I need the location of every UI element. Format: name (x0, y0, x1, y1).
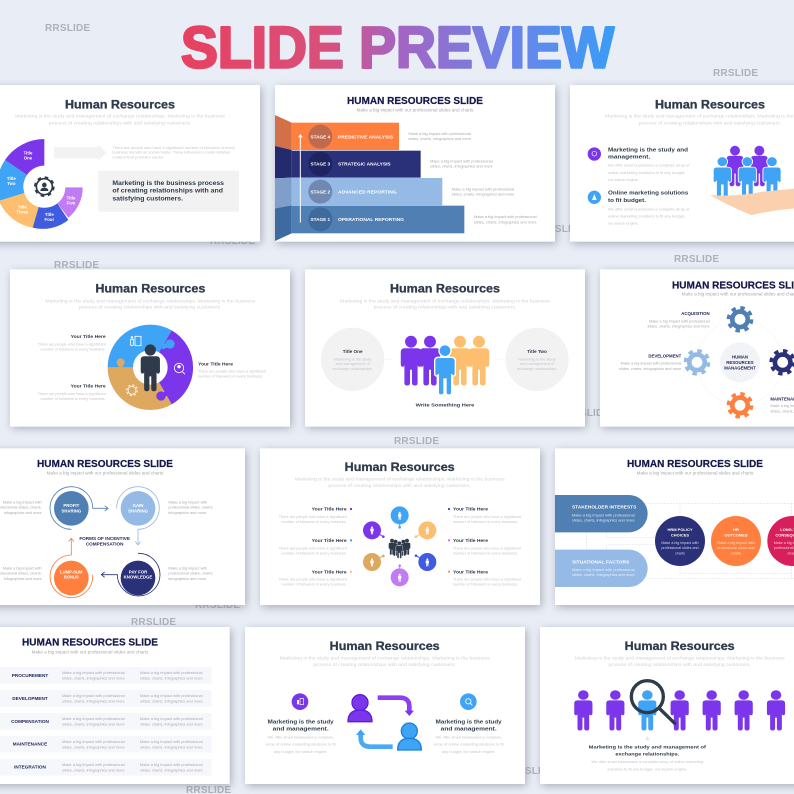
text block (589, 745, 706, 771)
heading: Human Resources (625, 639, 735, 653)
subtitle (605, 114, 794, 126)
circle: title one: Marketing is the study (334, 357, 371, 361)
text block: content that provides useful (112, 156, 163, 160)
panel: slide 3 people on hand (570, 85, 794, 244)
text: top left: infographics and more (4, 511, 42, 515)
list: right: number of followers in every business. (453, 583, 518, 587)
heading: Human Resources (655, 97, 765, 111)
bubble cluster (363, 506, 436, 586)
callout: Marketing is the business process (112, 180, 224, 187)
icon: group (389, 539, 410, 558)
circle: title one: Title One (343, 349, 363, 354)
circle: title two: and management of (520, 362, 555, 366)
panel: slide 11 exchange (245, 627, 527, 786)
row: development: slides, charts, infographics and more (140, 699, 203, 703)
text: bottom right: infographics and more (168, 577, 206, 581)
people row (574, 690, 785, 730)
center label: COMPENSATION (86, 542, 124, 547)
circle: hr outcomes: charts (731, 551, 741, 555)
panel: slide 8 hub bubbles (260, 448, 542, 607)
row: maintenance: MAINTENANCE (13, 742, 47, 747)
row: integration: Make a big impact with professional (140, 763, 203, 767)
circle: long-term consequences (767, 516, 794, 566)
row: procurement: slides, charts, infographics and more (62, 676, 125, 680)
text block: exchange relationships. (615, 751, 680, 757)
stage descriptions: slides, charts, infographics and more (474, 220, 537, 224)
circle: title two (505, 328, 569, 391)
row: maintenance: slides, charts, infographics and more (62, 745, 125, 749)
circle: title one (321, 328, 384, 391)
text block: budget: Online marketing solutions (608, 191, 688, 197)
subtitle: process of creating relationships with and satisfying customers. (313, 662, 456, 668)
row: maintenance (0, 736, 212, 753)
donut chart: Two (7, 181, 16, 186)
callout: satisfying customers. (112, 195, 183, 202)
pointer (645, 736, 649, 740)
subtitle: Marketing is the study and management of exchange relationships. Marketing is the business (280, 656, 490, 662)
label: development (619, 353, 682, 371)
heading: Human Resources (330, 639, 440, 653)
circle: title one: exchange relationships. (333, 367, 373, 371)
row: development: DEVELOPMENT (12, 696, 48, 701)
text block: right: and management. (441, 727, 497, 733)
heading: HUMAN RESOURCES SLIDE (627, 459, 764, 470)
callout: of creating relationships with and (112, 188, 223, 195)
icon: person badge (588, 191, 601, 204)
heading: Human Resources (95, 282, 206, 296)
node: profit sharing: SHARING (61, 508, 82, 513)
list: right: number of followers in every business. (453, 520, 518, 524)
circle: hrm policy choices: charts (675, 551, 685, 555)
text block: left: array of online marketing solutions to fit (266, 743, 337, 747)
heading: HUMAN RESOURCES SLIDE (37, 459, 174, 470)
center label: FORMS OF INCENTIVE (79, 536, 130, 541)
text: bottom right: Make a big impact with (168, 567, 207, 571)
circle: title two: exchange relationships. (517, 367, 557, 371)
circle: hr outcomes: OUTCOMES (724, 532, 748, 537)
text: bottom left: Make a big impact with (3, 567, 42, 571)
icon: phone (131, 336, 141, 346)
circle: hrm policy choices (655, 516, 705, 566)
watermarks: RRSLIDE (713, 68, 758, 79)
node: lump sum bonus: LUMP-SUM (60, 569, 83, 574)
watermarks: RRSLIDE (131, 617, 176, 628)
node: gain sharing: GAIN (133, 503, 143, 508)
panel: slide 6 gears (600, 269, 794, 428)
text block: right (434, 719, 505, 754)
subtitle: process of creating relationships with and satisfying customers. (328, 483, 471, 489)
panel: slide 2 stages (275, 85, 557, 244)
list: right: Your Title Here (453, 507, 488, 513)
text: right: Your Title Here (198, 361, 233, 367)
text: bottom left: infographics and more (4, 577, 42, 581)
text block: budget (608, 191, 690, 226)
row: integration: Make a big impact with professional (62, 763, 125, 767)
list: left: Your Title Here (312, 538, 347, 544)
list: right: There are people who have a significant (453, 578, 522, 582)
heading: HUMAN RESOURCES SLIDE (347, 96, 484, 107)
row: maintenance: Make a big impact with professional (62, 740, 125, 744)
donut chart: Title (45, 212, 54, 217)
text: top right (168, 501, 213, 515)
text block: study: online marketing solutions to fit any budget, (608, 171, 685, 175)
stair chart (275, 115, 464, 241)
row: development (0, 690, 212, 707)
list: right: There are people who have a significant (453, 515, 522, 519)
label: development: slides, charts, infographics and more (619, 367, 681, 371)
list: left: There are people who have a significant (279, 515, 348, 519)
row: compensation: COMPENSATION (11, 719, 49, 724)
node: gain sharing (117, 487, 159, 545)
illustration: team (401, 336, 489, 395)
arrow: blue (356, 729, 393, 747)
list: right: There are people who have a significant (453, 546, 522, 550)
node: lump sum bonus (50, 538, 93, 598)
text: top left (38, 334, 107, 351)
subtitle: Marketing is the study and management of exchange relationships. Marketing is the business (15, 114, 226, 120)
text: top left: Your Title Here (71, 334, 106, 340)
box: stakeholder interests: Make a big impact with professional (572, 513, 635, 517)
box: situational factors: slides, charts, infographics and more (572, 573, 635, 577)
text block: budget: We offer small businesses a complete array of (608, 207, 690, 211)
subtitle: Marketing is the study and management of exchange relationships. Marketing is the business (45, 298, 256, 304)
text: bottom right (168, 567, 213, 581)
row: development: Make a big impact with professional (140, 694, 203, 698)
list: left: There are people who have a significant (279, 546, 348, 550)
donut chart: Three (16, 209, 29, 214)
row: maintenance: Make a big impact with professional (140, 740, 203, 744)
list: right (448, 507, 522, 587)
panel: slide 5 team (305, 269, 587, 428)
title: SLIDE PREVIEW (181, 16, 614, 80)
label: maintenance (770, 396, 794, 413)
subtitle: Marketing is the study and management of exchange relationships. Marketing is the business (340, 298, 551, 304)
box: stakeholder interests: slides, charts, infographics and more (572, 518, 635, 522)
box: situational factors: Make a big impact with professional (572, 568, 635, 572)
gear: development (685, 351, 709, 374)
subtitle: Marketing is the study and management of exchange relationships. Marketing is the business (295, 477, 505, 483)
panel: slide 9 flow (555, 448, 794, 607)
subtitle: Make a big impact with our professional slides and charts (357, 107, 473, 112)
subtitle: Marketing is the study and management of exchange relationships. Marketing is the business (575, 656, 785, 662)
row: compensation: Make a big impact with professional (62, 717, 125, 721)
gear: maintenance (728, 394, 752, 417)
row: procurement: PROCUREMENT (12, 673, 48, 678)
watermarks: RRSLIDE (510, 766, 555, 777)
watermarks: RRSLIDE (195, 600, 240, 611)
row: procurement: Make a big impact with professional (62, 671, 125, 675)
text: top left: number of followers in every business. (41, 347, 106, 351)
stage descriptions: slides, charts, infographics and more (408, 137, 471, 141)
callout (98, 171, 239, 212)
icon: gear (127, 385, 137, 396)
node: pay for knowledge: PAY FOR (129, 569, 148, 574)
text block: left: Marketing is the study (268, 719, 335, 725)
stage descriptions: Make a big impact with professional (474, 215, 537, 219)
subtitle: process of creating relationships with and satisfying customers. (374, 305, 516, 311)
row: development: slides, charts, infographics and more (62, 699, 125, 703)
watermarks: RRSLIDE (565, 408, 610, 419)
subtitle: Make a big impact with our professional slides and charts (682, 292, 794, 297)
heading: Human Resources (345, 460, 455, 474)
text block: Marketing is the study and management of (589, 745, 706, 751)
text block: study: management. (608, 155, 651, 161)
arrow (54, 145, 107, 161)
heading: HUMAN RESOURCES SLIDE (22, 638, 159, 649)
panel: slide 1 pie process (0, 85, 262, 244)
node: profit sharing: PROFIT (63, 503, 80, 508)
icon: purple badge (292, 693, 308, 710)
subtitle (15, 114, 226, 126)
text: right (198, 361, 267, 379)
stage descriptions: slides, charts, infographics and more (430, 165, 493, 169)
text block: left: and management. (273, 727, 329, 733)
subtitle (295, 477, 505, 489)
center hub: HUMAN (732, 354, 748, 359)
text: top left: There are people who have a significant (38, 342, 107, 346)
text: bottom left (0, 567, 42, 581)
panel: slide 4 puzzle circle (10, 269, 292, 428)
list: right: number of followers in every business. (453, 551, 518, 555)
text: top left (0, 501, 42, 515)
donut chart: Title (18, 204, 27, 209)
donut chart (0, 139, 83, 229)
node: lump sum bonus: BONUS (64, 575, 79, 580)
list: right: Your Title Here (453, 538, 488, 544)
donut chart: One (24, 155, 33, 160)
node: pay for knowledge: KNOWLEDGE (124, 575, 152, 580)
donut chart: Title (24, 150, 33, 155)
text: bottom left: number of followers in every business. (41, 397, 106, 401)
watermarks: RRSLIDE (45, 23, 90, 34)
list: left: number of followers in every business. (282, 583, 347, 587)
circle: title two: Marketing is the study (518, 357, 556, 361)
text block: study: Marketing is the study and (608, 147, 689, 153)
text: top right: Make a big impact with (168, 501, 207, 505)
box: stakeholder interests (555, 495, 648, 532)
subtitle: process of creating relationships with and satisfying customers. (639, 120, 781, 126)
row: procurement: Make a big impact with professional (140, 671, 203, 675)
icon: magnifier (631, 681, 675, 723)
text: top right: professional slides, charts, (168, 506, 213, 510)
label: acquisition (647, 311, 710, 329)
text: bottom right: professional slides, charts, (168, 572, 213, 576)
circle: title two: Title Two (527, 349, 547, 354)
text block: business domain on social media. These influencers create detailed (112, 151, 230, 155)
row: procurement (0, 667, 212, 684)
row: integration (0, 759, 212, 776)
panel: slide 10 table (0, 627, 231, 786)
stage descriptions (408, 132, 537, 224)
circle: hrm policy choices: CHOICES (671, 532, 689, 537)
text block (112, 146, 235, 160)
list: left: There are people who have a significant (279, 578, 348, 582)
row: compensation: Make a big impact with professional (140, 717, 203, 721)
row: integration: slides, charts, infographics and more (140, 768, 203, 772)
row: development: Make a big impact with professional (62, 694, 125, 698)
node: gain sharing: SHARING (128, 508, 149, 513)
heading: Human Resources (65, 97, 175, 111)
row: compensation (0, 713, 212, 730)
stair chart: STAGE 2 (311, 189, 331, 194)
subtitle: process of creating relationships with and satisfying customers. (49, 120, 191, 126)
list: left (279, 507, 352, 587)
icon: blue badge (460, 693, 477, 710)
list: left: Your Title Here (312, 507, 347, 513)
stage descriptions: slides, charts, infographics and more (452, 192, 514, 196)
stage descriptions: Make a big impact with professional (430, 160, 493, 164)
stage descriptions: Make a big impact with professional (408, 132, 471, 136)
circle: hr outcomes: Make a big impact with (717, 541, 755, 545)
label: acquisition: ACQUISITION (681, 311, 710, 316)
stage descriptions: Make a big impact with professional (452, 187, 514, 191)
donut chart: Title (7, 176, 16, 181)
watermarks: RRSLIDE (54, 260, 99, 271)
text block: study (608, 147, 690, 182)
box: situational factors (555, 550, 648, 587)
subtitle (45, 298, 256, 311)
stair chart: OPERATIONAL REPORTING (338, 217, 404, 222)
text block: budget: online marketing solutions to fit any budget, (608, 215, 685, 219)
text block: left: We offer small businesses a complete (268, 736, 334, 740)
node: profit sharing (50, 487, 108, 529)
circle: hr outcomes: professional slides and (717, 546, 755, 550)
watermarks: RRSLIDE (674, 254, 719, 265)
subtitle (340, 298, 551, 311)
row: compensation: slides, charts, infographics and more (140, 722, 203, 726)
stair chart: STAGE 4 (311, 134, 331, 139)
heading: Human Resources (390, 282, 500, 296)
text block: right: any budget, our search engine. (442, 750, 495, 754)
subtitle: Make a big impact with our professional slides and charts (47, 471, 163, 476)
label: development: Make a big impact with professional (621, 362, 681, 366)
text: top left: Make a big impact with (3, 501, 42, 505)
row: integration: INTEGRATION (14, 765, 46, 770)
icon: gear with person (35, 177, 54, 196)
subtitle: process of creating relationships with and satisfying customers. (79, 305, 222, 311)
node: pay for knowledge (101, 553, 160, 596)
stair chart: ADVANCED REPORTING (338, 189, 397, 194)
watermarks: RRSLIDE (394, 436, 439, 447)
stair chart: STAGE 1 (311, 217, 331, 222)
subtitle: process of creating relationships with and satisfying customers. (608, 662, 751, 668)
label: acquisition: Make a big impact with professional (649, 319, 710, 323)
row: procurement: slides, charts, infographics and more (140, 676, 203, 680)
text block: right: array of online marketing solutions to fit (434, 743, 505, 747)
text: top right: infographics and more (168, 511, 206, 515)
icon: person (141, 344, 160, 391)
label: development: DEVELOPMENT (648, 353, 682, 358)
panel: slide 12 search people (540, 627, 794, 786)
text block: solutions to fit any budget, our search engine. (607, 767, 687, 771)
center hub (720, 342, 760, 382)
text block: study: our search engine. (608, 178, 639, 182)
text: bottom left: There are people who have a significant (38, 392, 107, 396)
gear: acquisition (728, 308, 752, 331)
illustration: people in hand (710, 146, 794, 215)
icon: blue person (398, 723, 421, 750)
text block: We offer small businesses a complete array of online marketing (591, 760, 703, 764)
circle: hr outcomes (711, 516, 761, 566)
row: compensation: slides, charts, infographics and more (62, 722, 125, 726)
donut chart: Title (67, 195, 76, 200)
text: bottom left (38, 384, 107, 401)
subtitle: Make a big impact with our professional slides and charts (637, 471, 753, 476)
circle: hrm policy choices: HRM POLICY (667, 527, 693, 532)
stair chart: STAGE 3 (311, 162, 331, 167)
text block: budget: our search engine. (608, 222, 639, 226)
center hub: MANAGEMENT (724, 366, 756, 371)
panel: slide 7 incentive cycle (0, 448, 247, 607)
circle: hrm policy choices: Make a big impact with (661, 541, 699, 545)
text block: study: We offer small businesses a complete array of (608, 164, 690, 168)
circle: hrm policy choices: professional slides and (661, 546, 699, 550)
icon: purple person (348, 695, 372, 722)
text block: There are people who have a significant number of followers in every (112, 146, 235, 150)
caption: Write Something Here (416, 402, 475, 408)
center hub: RESOURCES (726, 360, 754, 365)
circle: hr outcomes: HR (733, 527, 739, 532)
center label (79, 536, 130, 547)
row: integration: slides, charts, infographics and more (62, 768, 125, 772)
text: bottom left: Your Title Here (71, 384, 106, 390)
stair chart: PREDICTIVE ANALYSIS (338, 134, 393, 139)
list: left: Your Title Here (312, 569, 347, 575)
list: left: number of followers in every business. (282, 551, 347, 555)
watermarks: RRSLIDE (210, 236, 255, 247)
label: acquisition: slides, charts, infographics and more (647, 325, 710, 329)
icon: magnifier (174, 363, 185, 374)
icon: search badge (588, 147, 601, 161)
box: situational factors: SITUATIONAL FACTORS (572, 559, 629, 564)
list: left: number of followers in every business. (282, 520, 347, 524)
list: right: Your Title Here (453, 569, 488, 575)
row: maintenance: slides, charts, infographics and more (140, 745, 203, 749)
donut chart: Four (45, 217, 54, 222)
text: right: There are people who have a significant (198, 370, 267, 374)
gear: integration (771, 351, 794, 374)
text block: right: We offer small businesses a complete (436, 736, 502, 740)
subtitle (575, 656, 785, 668)
puzzle diagram (108, 325, 193, 410)
box: stakeholder interests: STAKEHOLDER INTERESTS (572, 505, 636, 510)
subtitle: Make a big impact with our professional slides and charts (32, 649, 148, 654)
arrow: purple (378, 698, 414, 716)
watermarks: RRSLIDE (540, 224, 585, 235)
text: right: number of followers in every business. (198, 375, 263, 379)
text block: budget: to fit budget. (608, 198, 646, 204)
circle: title one: and management of (336, 362, 371, 366)
subtitle (280, 656, 490, 668)
text block: left: any budget, our search engine. (274, 750, 327, 754)
text block: right: Marketing is the study (436, 719, 503, 725)
stair chart: STRATEGIC ANALYSIS (338, 162, 391, 167)
text block: left (266, 719, 337, 754)
donut chart: Five (67, 200, 76, 205)
